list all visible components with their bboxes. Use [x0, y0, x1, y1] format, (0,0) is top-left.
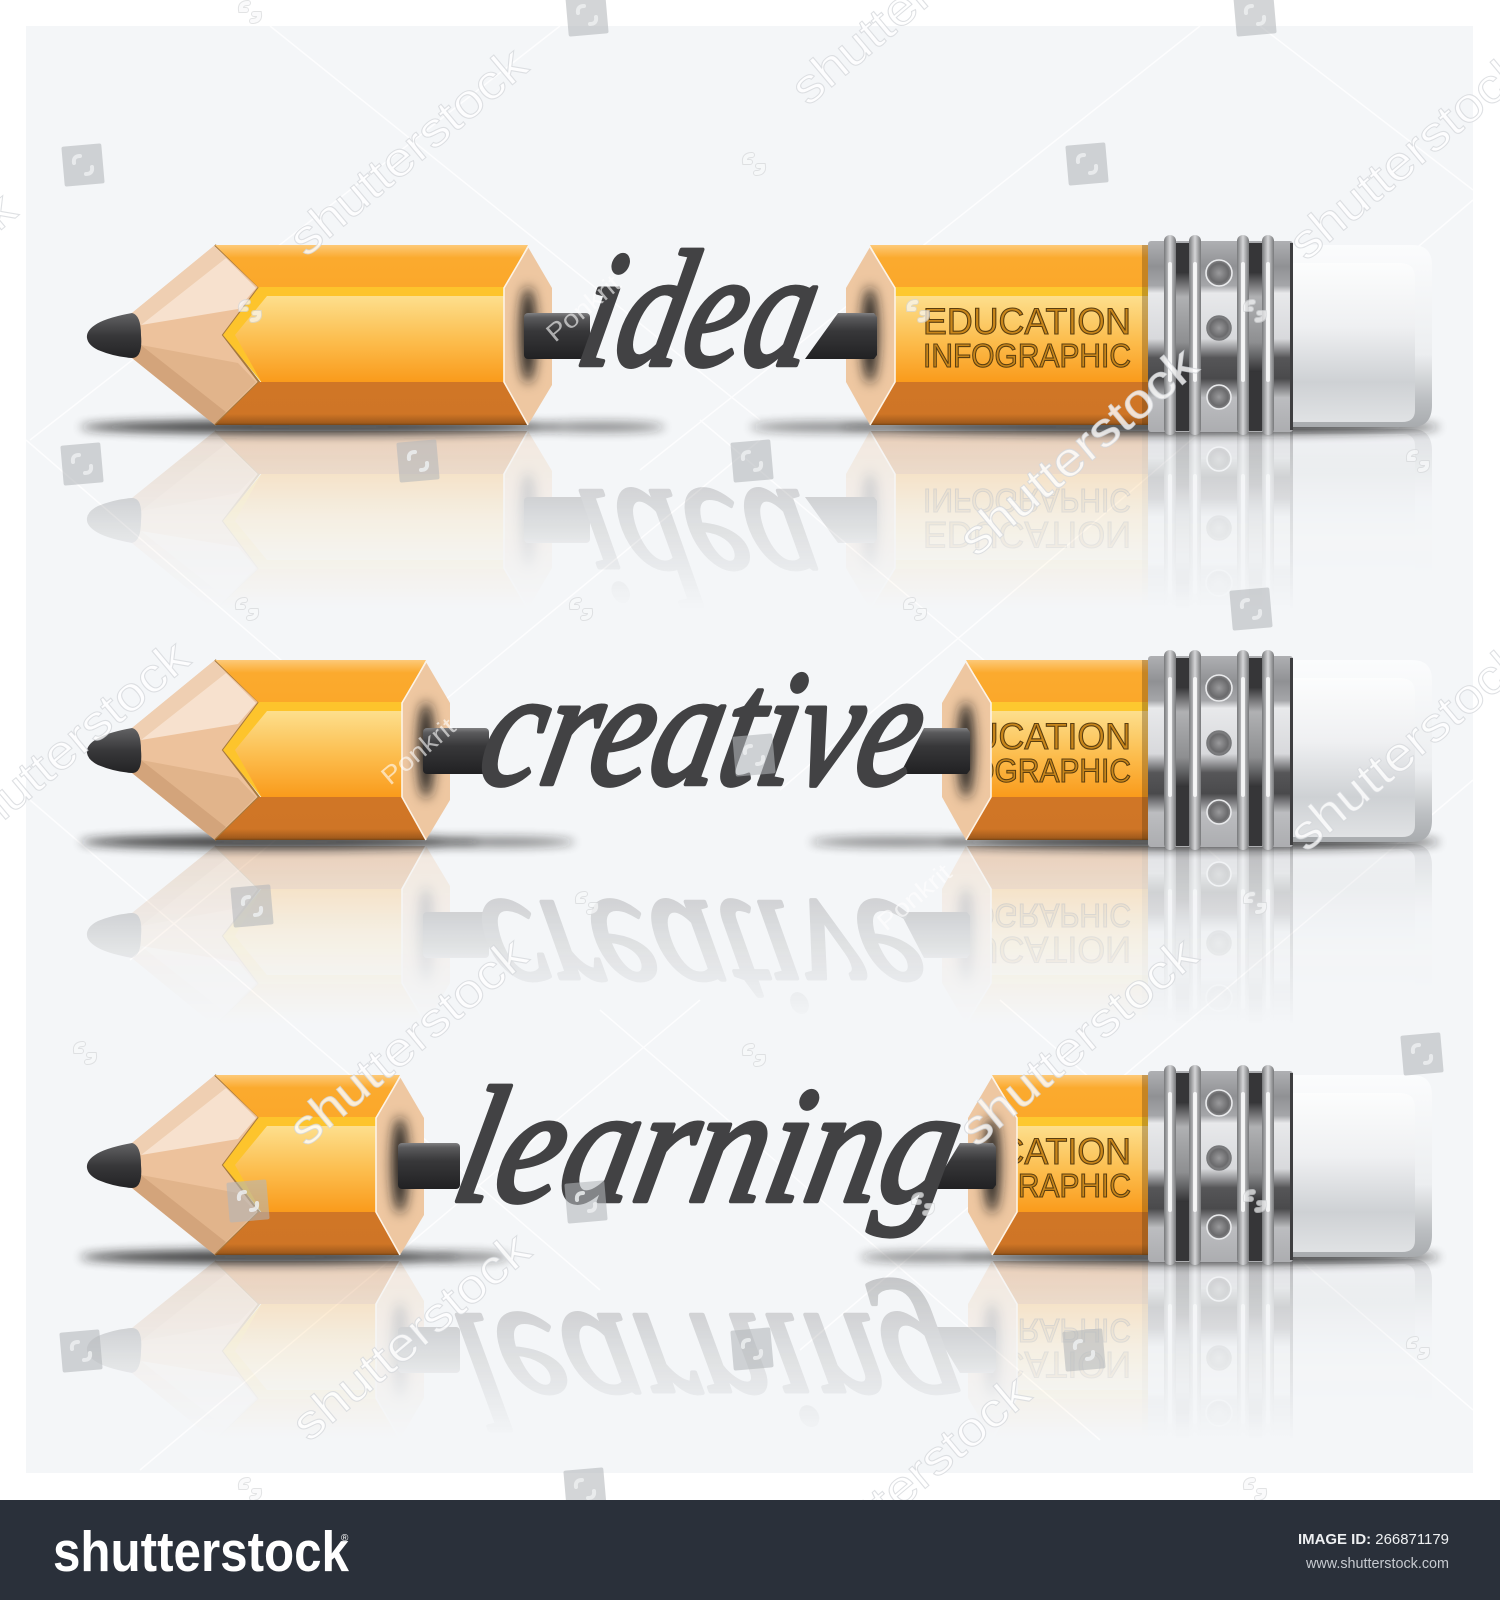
watermark: shutterstock diagonal text: shutterstock [279, 927, 538, 1156]
watermark: Ponkrit credits [376, 270, 957, 937]
watermark: shutterstock diagonal text: shutterstock [949, 337, 1208, 566]
registered mark: ® [341, 1533, 349, 1544]
reflection: creative pencil [87, 844, 1432, 999]
pencil row: creative [87, 637, 1432, 850]
footer logo: shutterstock [53, 1520, 349, 1584]
floor shadows: creative pencil [80, 835, 1440, 849]
watermark: shutterstock diagonal text: shutterstock [782, 1365, 1041, 1594]
image id: IMAGE ID: 266871179 [1298, 1531, 1449, 1548]
watermark: shutterstock diagonal text: shutterstock [279, 37, 538, 266]
reflection: idea pencil [87, 429, 1432, 584]
watermark: shutterstock diagonal text: shutterstock [282, 1222, 541, 1451]
floor shadows: idea pencil [80, 420, 1440, 434]
reflection: learning pencil [87, 1259, 1432, 1414]
watermark: Ponkrit credits: Ponkrit [541, 270, 626, 348]
watermark: Ponkrit credits: Ponkrit [376, 713, 461, 791]
pencil row: learning [87, 1054, 1432, 1265]
footer bar [0, 1500, 1500, 1600]
watermark: shutterstock diagonal text: shutterstock [949, 927, 1208, 1156]
pencil row: idea [87, 218, 1432, 435]
watermark: Ponkrit credits: Ponkrit [872, 859, 957, 937]
website url: www.shutterstock.com [1305, 1555, 1449, 1572]
floor shadows: learning pencil [80, 1250, 1440, 1264]
